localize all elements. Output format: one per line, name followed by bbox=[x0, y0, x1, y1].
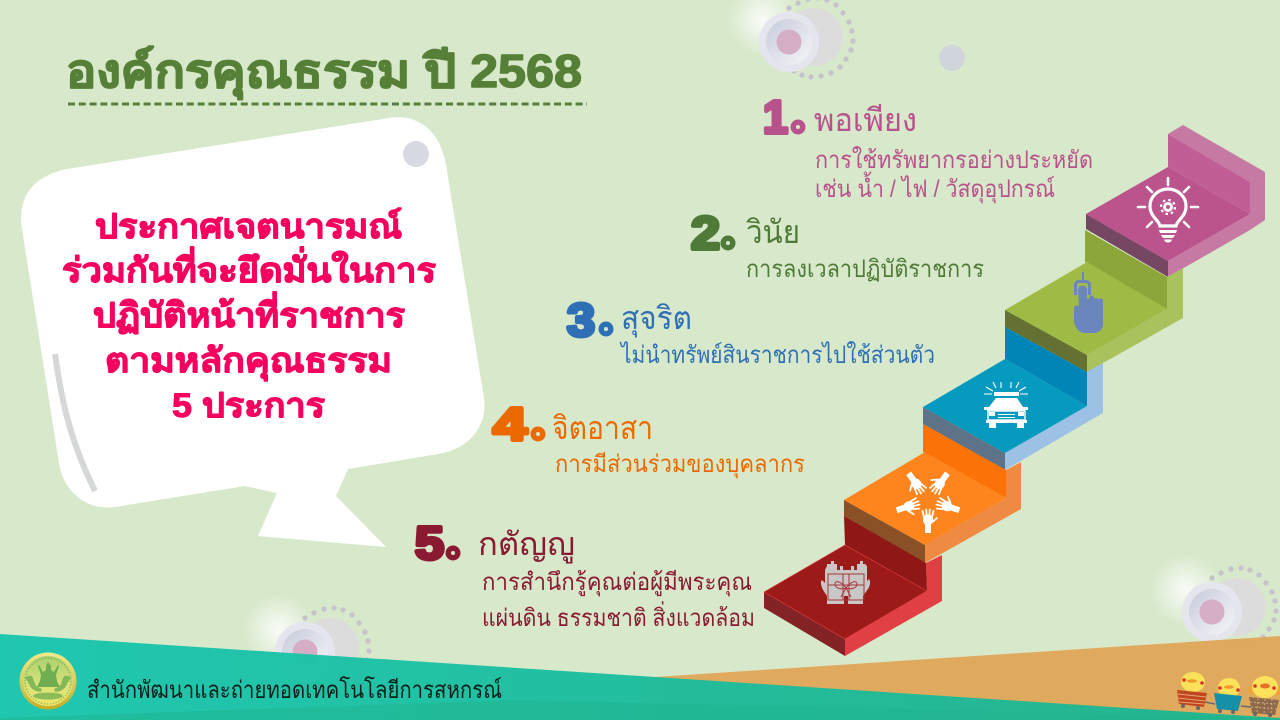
item 2: วินัย: การลงเวลาปฏิบัติราชการ bbox=[746, 256, 984, 283]
item 4: จิตอาสา: จิตอาสา bbox=[552, 410, 653, 446]
item 3: สุจริต: 3 bbox=[567, 294, 595, 346]
item 2: วินัย: 2 bbox=[691, 207, 720, 259]
item 4: จิตอาสา bbox=[493, 398, 805, 479]
icon: five hands bbox=[895, 468, 962, 533]
item 3: สุจริต bbox=[567, 294, 935, 369]
bubble text: ร่วมกันที่จะยึดมั่นในการ bbox=[62, 246, 437, 290]
icon: gift in hands bbox=[821, 561, 870, 604]
step 2 green bbox=[1005, 230, 1183, 372]
decoration: lower left disc cluster bbox=[243, 594, 372, 690]
staircase bbox=[764, 125, 1265, 656]
teal footer band bbox=[0, 634, 1280, 720]
footer lower shade bbox=[0, 700, 1280, 720]
item 2: วินัย bbox=[691, 207, 984, 283]
item 5: กตัญญู: กตัญญู bbox=[478, 526, 575, 564]
item 4: จิตอาสา: 4 bbox=[493, 398, 528, 450]
bubble text: 5 ประการ bbox=[172, 387, 326, 425]
title underline bbox=[68, 102, 587, 106]
icon: chicks in carts bbox=[1177, 672, 1280, 717]
speech bubble bbox=[21, 117, 485, 547]
item 4: จิตอาสา: การมีส่วนร่วมของบุคลากร bbox=[555, 451, 805, 479]
footer text: สำนักพัฒนาและถ่ายทอดเทคโนโลยีการสหกรณ์ bbox=[87, 676, 502, 704]
bubble text: ตามหลักคุณธรรม bbox=[105, 342, 392, 382]
item 1: พอเพียง bbox=[763, 91, 1093, 204]
icon: light bulb bbox=[1138, 178, 1198, 242]
bubble text bbox=[62, 207, 437, 425]
bubble text: ประกาศเจตนารมณ์ bbox=[95, 207, 402, 246]
item 3: สุจริต: ไม่นำทรัพย์สินราชการไปใช้ส่วนตัว bbox=[619, 341, 935, 369]
item 5: กตัญญู: การสำนึกรู้คุณต่อผู้มีพระคุณ bbox=[482, 569, 752, 597]
item 2: วินัย: วินัย bbox=[746, 214, 800, 250]
orange ground band bbox=[640, 636, 1280, 720]
title: องค์กรคุณธรรม ปี 2568 bbox=[66, 45, 582, 100]
icon: pointing hand bbox=[1074, 272, 1103, 333]
item 5: กตัญญู bbox=[415, 517, 755, 632]
item 3: สุจริต: สุจริต bbox=[621, 300, 692, 338]
step 1 pink bbox=[1086, 125, 1265, 277]
item 1: พอเพียง: พอเพียง bbox=[814, 102, 917, 138]
item 1: พอเพียง: เช่น น้ำ / ไฟ / วัสดุอุปกรณ์ bbox=[815, 171, 1055, 204]
bubble text: ปฏิบัติหน้าที่ราชการ bbox=[93, 291, 406, 335]
step 5 red bbox=[764, 516, 942, 656]
decoration: right disc cluster bbox=[1150, 554, 1279, 650]
decoration: top disc cluster bbox=[727, 0, 965, 80]
icon: police car bbox=[984, 382, 1028, 428]
step 4 orange bbox=[844, 424, 1021, 563]
item 1: พอเพียง: การใช้ทรัพยากรอย่างประหยัด bbox=[815, 146, 1093, 174]
item 5: กตัญญู: 5 bbox=[415, 517, 444, 569]
logo seal bbox=[20, 652, 76, 710]
item 1: พอเพียง: 1 bbox=[763, 91, 788, 143]
item 5: กตัญญู: แผ่นดิน ธรรมชาติ สิ่งแวดล้อม bbox=[482, 601, 755, 632]
step 3 blue bbox=[923, 327, 1103, 470]
